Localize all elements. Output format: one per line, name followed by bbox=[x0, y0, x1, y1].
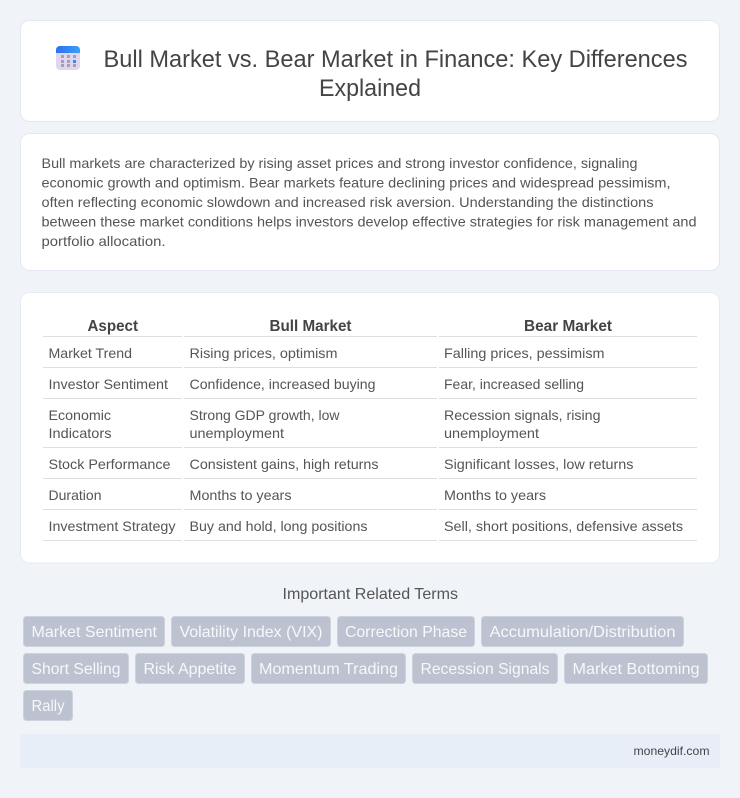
row: economic indicators: Economic bbox=[48, 407, 111, 423]
heading: related terms: Important Related Terms bbox=[282, 586, 458, 603]
footer source: moneydif.com bbox=[634, 744, 710, 758]
row: market trend bbox=[48, 345, 604, 361]
row: economic indicators: Strong GDP growth, low bbox=[190, 407, 340, 423]
tag: correction phase: Correction Phase bbox=[345, 624, 467, 641]
row: economic indicators bbox=[48, 407, 600, 441]
row: stock performance: Stock Performance bbox=[48, 456, 171, 472]
row: economic indicators: Indicators bbox=[48, 425, 112, 441]
tag: market sentiment bbox=[24, 616, 164, 646]
row: economic indicators: Recession signals, rising bbox=[444, 407, 600, 423]
row: stock performance: Significant losses, low returns bbox=[444, 456, 634, 472]
text block: summary paragraph: economic growth and optimism. Bear markets feature declining prices and widespread pessimism, bbox=[42, 174, 670, 190]
panel: title card bbox=[20, 20, 720, 122]
text block: summary paragraph: often reflecting economic slowdown and increased risk aversion. Understanding the distinctions bbox=[42, 194, 654, 210]
tag: momentum trading bbox=[252, 654, 406, 684]
title bbox=[104, 46, 688, 102]
tag: correction phase bbox=[338, 616, 474, 646]
row: investor sentiment bbox=[48, 376, 584, 392]
footer bar bbox=[20, 734, 720, 768]
tag: market sentiment: Market Sentiment bbox=[32, 624, 158, 641]
tag: rally bbox=[24, 690, 72, 720]
row: stock performance: Consistent gains, high returns bbox=[190, 456, 378, 472]
tag: short selling: Short Selling bbox=[32, 661, 120, 678]
text block: summary paragraph: portfolio allocation. bbox=[42, 233, 166, 249]
tag: recession signals bbox=[412, 654, 558, 684]
row: investor sentiment: Confidence, increased buying bbox=[190, 376, 376, 392]
row: duration bbox=[48, 487, 546, 503]
tag: accumulation/distribution: Accumulation/Distribution bbox=[490, 624, 676, 641]
tag: market bottoming bbox=[564, 654, 708, 684]
table header bbox=[88, 318, 613, 335]
tag: accumulation/distribution bbox=[482, 616, 684, 646]
tag: risk appetite bbox=[136, 654, 244, 684]
row: market trend: Falling prices, pessimism bbox=[444, 345, 604, 361]
row: duration: Duration bbox=[48, 487, 102, 503]
text block: summary paragraph bbox=[42, 155, 696, 249]
table header: Bull Market bbox=[270, 318, 352, 335]
row: economic indicators: unemployment bbox=[444, 425, 539, 441]
tag: volatility index: Volatility Index (VIX) bbox=[180, 624, 322, 641]
title: Bull Market vs. Bear Market in Finance: Key Differences bbox=[104, 46, 688, 73]
table header: Bear Market bbox=[524, 318, 613, 335]
row: stock performance bbox=[48, 456, 634, 472]
tag: recession signals: Recession Signals bbox=[420, 661, 550, 678]
title: Explained bbox=[319, 75, 421, 102]
panel: comparison table bbox=[20, 292, 720, 563]
row: investment strategy bbox=[48, 518, 683, 534]
tags: important related terms bbox=[24, 616, 708, 720]
tag: short selling bbox=[24, 654, 128, 684]
tag: rally: Rally bbox=[32, 698, 64, 715]
row: investment strategy: Buy and hold, long positions bbox=[190, 518, 368, 534]
icon: calendar bbox=[56, 46, 80, 70]
row: market trend: Rising prices, optimism bbox=[190, 345, 338, 361]
row: market trend: Market Trend bbox=[48, 345, 132, 361]
tag: market bottoming: Market Bottoming bbox=[572, 661, 700, 678]
row: investor sentiment: Fear, increased selling bbox=[444, 376, 584, 392]
tag: momentum trading: Momentum Trading bbox=[259, 661, 398, 678]
tag: volatility index bbox=[172, 616, 330, 646]
row: investment strategy: Sell, short positions, defensive assets bbox=[444, 518, 683, 534]
row: investment strategy: Investment Strategy bbox=[48, 518, 176, 534]
text block: summary paragraph: Bull markets are characterized by rising asset prices and strong investor confidence, signaling bbox=[42, 155, 638, 171]
row: duration: Months to years bbox=[190, 487, 292, 503]
text block: summary paragraph: between these market conditions helps investors develop effective strategies for risk management and bbox=[42, 214, 696, 230]
row: investor sentiment: Investor Sentiment bbox=[48, 376, 168, 392]
tag: risk appetite: Risk Appetite bbox=[144, 661, 237, 678]
row: economic indicators: unemployment bbox=[190, 425, 284, 441]
table header: Aspect bbox=[88, 318, 139, 335]
panel: description bbox=[20, 134, 720, 270]
row: duration: Months to years bbox=[444, 487, 546, 503]
